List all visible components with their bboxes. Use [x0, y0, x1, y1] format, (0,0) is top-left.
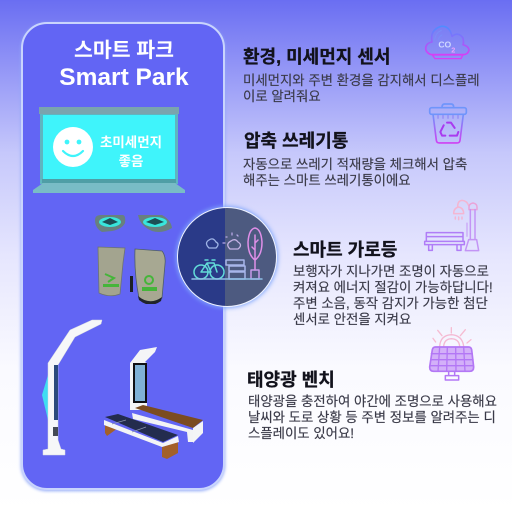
text: street light: 켜져요 에너지 절감이 가능하답니다!: [293, 280, 493, 295]
icon: recycling trash can: [428, 103, 468, 144]
illustration: air quality display: [33, 107, 185, 193]
icon: co2 cloud: 2: [452, 46, 456, 55]
text: street light: 보행자가 지나가면 조명이 자동으로: [293, 264, 489, 279]
heading: solar bench: 태양광 벤치: [247, 370, 335, 390]
icon circle: smart park: [177, 207, 277, 307]
illustration: smart street light: [42, 320, 102, 456]
display text: 초미세먼지: [100, 135, 162, 150]
icon: solar panel: [428, 327, 474, 381]
icon: smiley: [53, 127, 93, 167]
text: trash bin: 해주는 스마트 쓰레기통이에요: [243, 173, 411, 188]
text: street light: 센서로 안전을 지켜요: [293, 312, 411, 327]
icon: tree: [248, 228, 262, 278]
text: street light: 주변 소음, 동작 감지가 가능한 첨단: [293, 296, 488, 311]
panel title: 스마트 파크: [74, 39, 174, 62]
text: solar bench: 스플레이도 있어요!: [248, 426, 354, 441]
text: sensor: 이로 알려줘요: [243, 89, 321, 104]
display status: 좋음: [119, 154, 143, 169]
heading: sensor: 환경, 미세먼지 센서: [243, 47, 390, 67]
icon: bicycle: [194, 260, 224, 278]
icon: street light and bench: [424, 200, 480, 252]
icon: co2 cloud: CO: [439, 40, 452, 50]
heading: trash bin: 압축 쓰레기통: [244, 131, 348, 151]
text: trash bin: [243, 157, 467, 188]
illustration: solar bench with display: [104, 347, 203, 459]
illustration: compacting trash bins: [95, 215, 172, 304]
text: street light: [293, 264, 493, 327]
panel title: Smart Park: [59, 64, 189, 91]
text: sensor: 미세먼지와 주변 환경을 감지해서 디스플레: [243, 73, 480, 88]
icon: co2 cloud: [424, 26, 470, 60]
icon: bench: [226, 260, 244, 278]
icon: clouds: [206, 232, 240, 248]
text: solar bench: [248, 394, 497, 441]
text: trash bin: 자동으로 쓰레기 적재량을 체크해서 압축: [243, 157, 467, 172]
panel: smart park: [21, 22, 225, 490]
text: sensor: [243, 73, 480, 104]
text: solar bench: 태양광을 충전하여 야간에 조명으로 사용해요: [248, 394, 497, 409]
panel title: [59, 39, 189, 91]
text: solar bench: 날씨와 도로 상황 등 주변 정보를 알려주는 디: [248, 410, 496, 425]
heading: street light: 스마트 가로등: [293, 240, 397, 260]
